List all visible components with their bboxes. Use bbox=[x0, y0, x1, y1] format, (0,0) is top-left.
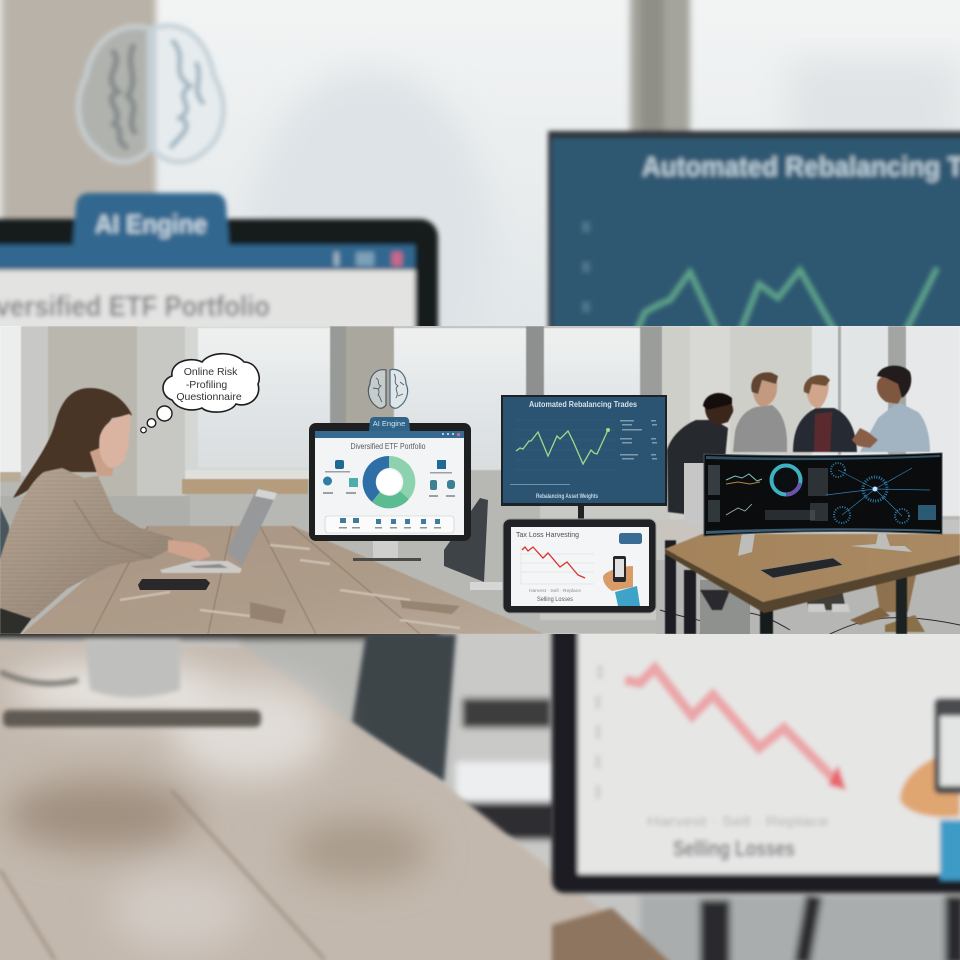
blurred brain icon bbox=[78, 26, 223, 162]
thought bubble: Online Risk-Profiling Questionnaire bbox=[141, 354, 259, 433]
thought bubble: Online Risk-Profiling Questionnaire: Online Risk bbox=[184, 366, 238, 378]
donut chart bbox=[363, 456, 389, 502]
keyboard bbox=[760, 558, 843, 578]
monitor: Diversified ETF Portfolio with AI Engine tab: AI Engine bbox=[373, 419, 405, 428]
blurred office chair bbox=[352, 634, 456, 782]
hair bbox=[13, 388, 132, 498]
side data columns bbox=[708, 465, 936, 522]
axes and grid bbox=[515, 420, 615, 470]
legend rows bbox=[620, 420, 657, 460]
green line chart bbox=[637, 268, 937, 330]
blurred window background bbox=[0, 0, 960, 326]
caption: Selling Losses: Selling Losses bbox=[673, 836, 795, 861]
blurred rebalancing monitor bbox=[548, 131, 960, 341]
icon: brain bbox=[368, 369, 408, 408]
caption: Rebalancing Asset Weights bbox=[536, 493, 598, 500]
colleague 4: light blue shirt bbox=[852, 366, 930, 452]
screen bbox=[315, 431, 464, 535]
monitor frame bbox=[309, 423, 471, 541]
green line chart bbox=[516, 430, 608, 464]
person: woman with laptop bbox=[0, 388, 277, 634]
mini line chart bbox=[726, 474, 762, 481]
top blurred band: enlarged view of the AI engine and rebalancing screens bbox=[0, 0, 960, 326]
trousers bbox=[0, 606, 32, 634]
central sharp panel: investing workflow scene bbox=[0, 326, 960, 634]
wooden left table bbox=[22, 526, 544, 634]
colleague 2: grey sweater bbox=[733, 372, 787, 452]
face bbox=[99, 414, 130, 468]
network map bbox=[826, 463, 930, 523]
tab: AI Engine bbox=[369, 417, 410, 431]
red falling line chart bbox=[521, 546, 594, 584]
icon: phone and hand bbox=[900, 750, 960, 817]
smartphone on table bbox=[138, 579, 210, 590]
colleague 1: dark jacket bbox=[667, 393, 733, 516]
laptop back on desk bbox=[684, 463, 706, 525]
monitor stand bbox=[373, 540, 398, 558]
blurred wooden table bbox=[0, 640, 672, 960]
monitor: Diversified ETF Portfolio with AI Engine tab bbox=[309, 417, 471, 561]
right wooden desk with back table bbox=[664, 533, 960, 634]
icon: hand holding phone bbox=[603, 566, 633, 591]
right icons bbox=[429, 460, 455, 497]
thought bubble: Online Risk-Profiling Questionnaire: Questionnaire bbox=[176, 391, 242, 403]
chart caption: Harvest · Sell · Replace bbox=[529, 588, 582, 593]
chair back bbox=[0, 506, 10, 560]
button bbox=[619, 533, 642, 544]
office chair behind monitor bbox=[444, 498, 488, 582]
tablet: Tax Loss Harvesting bbox=[503, 519, 656, 613]
axis ticks bbox=[598, 665, 600, 799]
neck bbox=[90, 448, 114, 476]
tablet: Tax Loss Harvesting: Selling Losses bbox=[537, 597, 573, 603]
heading: Diversified ETF Portfolio: Diversified ETF Portfolio bbox=[350, 442, 426, 451]
thought bubble: Online Risk-Profiling Questionnaire: -Profiling bbox=[186, 379, 227, 391]
caption labels: Harvest · Sell · Replace bbox=[647, 813, 829, 829]
heading: Tax Loss Harvesting bbox=[516, 530, 579, 539]
stands bbox=[738, 533, 755, 556]
arm shadow bbox=[74, 500, 152, 558]
red falling line bbox=[625, 668, 835, 780]
blurred floor and wall bbox=[0, 620, 960, 960]
office background with windows bbox=[0, 326, 960, 634]
blurred monitor stand bbox=[0, 640, 261, 727]
left icons bbox=[323, 460, 358, 494]
team of four colleagues bbox=[667, 366, 930, 516]
heading: AI Engine: AI Engine bbox=[95, 209, 207, 239]
colleagues' legs bbox=[700, 570, 925, 632]
hands on keyboard bbox=[168, 540, 211, 561]
knitted sweater torso bbox=[0, 468, 173, 619]
heading: Automated Rebalancing Trades bbox=[529, 400, 637, 409]
bottom blurred band: enlarged view of table and falling chart tablet bbox=[0, 620, 960, 960]
laptop bbox=[227, 488, 277, 566]
curved dark dashboard monitor bbox=[704, 453, 942, 556]
monitor: Automated Rebalancing Trades bbox=[501, 395, 667, 521]
frame bbox=[704, 453, 942, 536]
status ring bbox=[772, 466, 800, 494]
blurred laptop monitor with AI Engine tab bbox=[0, 189, 442, 326]
floor and cables under right desk bbox=[656, 560, 960, 634]
colleague 3: navy blazer bbox=[793, 375, 857, 452]
blurred tablet with falling chart bbox=[552, 620, 960, 893]
bottom icon strip bbox=[325, 516, 454, 533]
